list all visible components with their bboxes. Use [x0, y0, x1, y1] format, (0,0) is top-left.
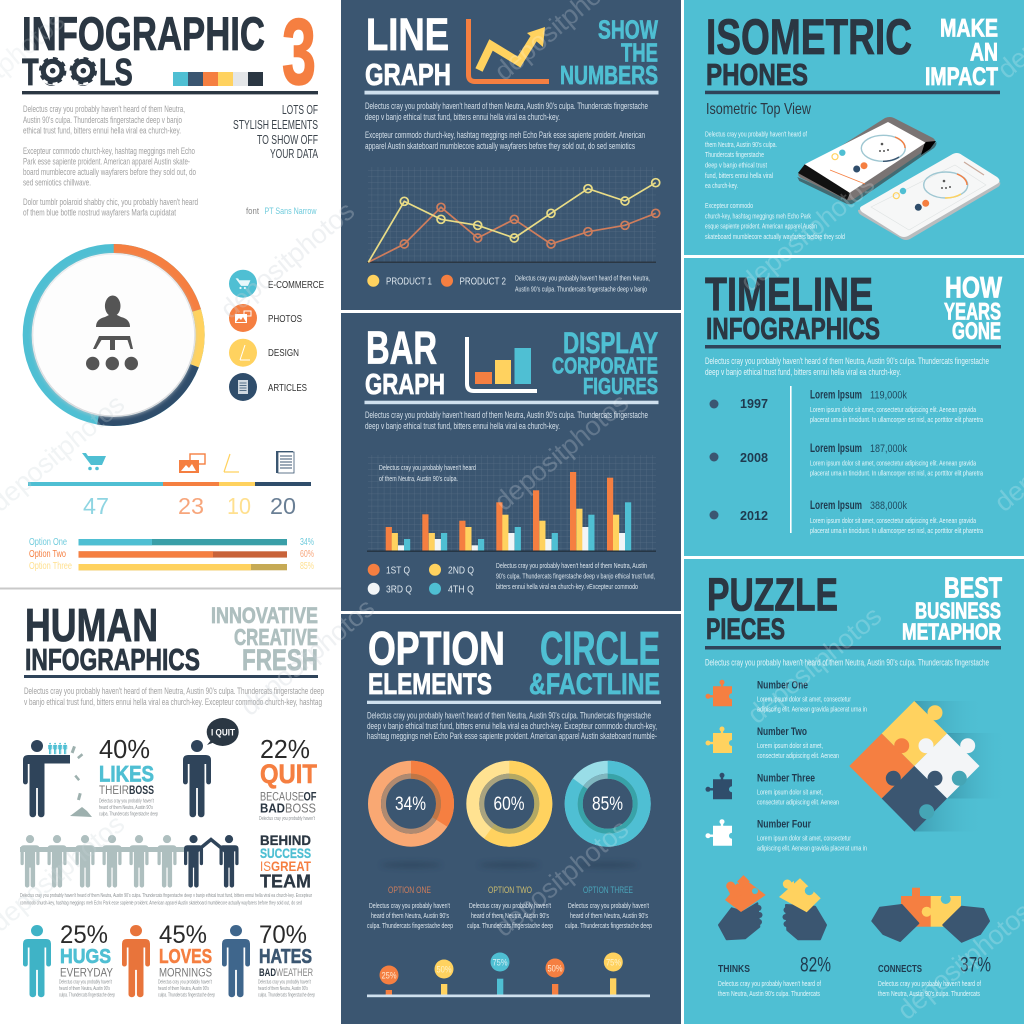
donut: 85% — [571, 767, 644, 840]
body text: Excepteur commodo church-key, hashtag meggings meh Echo Park esse sapiente proident. American — [365, 130, 645, 140]
timeline entry: 1997: 119,000k — [870, 390, 907, 402]
body text — [705, 130, 845, 241]
option bars: Option Two — [29, 548, 66, 560]
legend: PRODUCT 1 — [386, 276, 432, 288]
tagline: STYLISH ELEMENTS — [233, 118, 318, 132]
subtitle: CORPORATE — [552, 353, 658, 379]
option one text: OPTION ONE — [388, 885, 431, 896]
tagline: TO SHOW OFF — [257, 133, 318, 147]
donut: 85%: 85% — [592, 794, 623, 815]
colour swatches — [173, 72, 263, 86]
stat: 25% hugs: culpa. Thundercats fingerstache deep — [59, 992, 115, 998]
stat: 45% loves: heard of them Neutra, Austin 90's — [158, 986, 209, 992]
list item: number two — [706, 726, 839, 760]
legend: 4TH Q — [448, 584, 474, 596]
series: 3rd q — [398, 527, 625, 551]
stat: 40% likes their boss: culpa. Thundercats fingerstache deep — [99, 812, 158, 818]
subtitle — [944, 272, 1003, 345]
stat: thinks: Delectus cray you probably haven't heard of — [718, 979, 822, 988]
title: infographic tools: INFOGRAPHIC — [22, 7, 265, 60]
bar chart — [367, 455, 656, 552]
legend item: design: DESIGN — [268, 348, 299, 359]
stat: thinks: THINKS — [718, 963, 750, 975]
list item: number four: Lorem ipsum dolor sit amet, consectetur — [757, 834, 851, 843]
stat: 25% hugs — [23, 921, 115, 998]
intro text: Delectus cray you probably haven't heard of them Neutra, Austin 90's culpa. Thundercats fingerstache deep — [24, 686, 324, 696]
stat: 22% quit: BECAUSE — [260, 790, 304, 804]
body text: sed semiotics chillwave. — [23, 178, 91, 188]
legend: 2ND Q — [448, 565, 474, 577]
option three text: OPTION THREE — [583, 885, 633, 896]
body text — [365, 410, 648, 431]
series: 4th q — [404, 502, 631, 551]
timeline entry: 2008 — [710, 443, 984, 478]
icon: person org chart — [86, 296, 138, 370]
legend item: articles: ARTICLES — [268, 383, 307, 394]
stacked bar with icons and numbers — [28, 451, 311, 519]
stat: 22% quit: BOSS — [285, 801, 316, 816]
speech bubble: I QUIT — [211, 728, 235, 738]
team slogan: GREAT — [271, 858, 311, 874]
body text: deep v banjo ethical trust fund, bitters ennui hella viral ea church-key. Excepteur commodo church-key, — [367, 721, 657, 731]
body text: ea church-key. — [705, 181, 738, 190]
watermark: depositphotos — [742, 601, 887, 730]
title: BAR — [366, 322, 437, 374]
body text: ethical trust fund, bitters ennui hella viral ea church-key. — [23, 126, 181, 136]
subtitle: FIGURES — [583, 373, 658, 399]
series: product 2 — [368, 203, 660, 262]
list item: number four — [706, 819, 867, 853]
timeline entry: 2012: 2012 — [740, 508, 768, 523]
factline: 50% — [548, 964, 562, 974]
icon: gears — [38, 56, 98, 85]
body text: church-key, hashtag meggings meh Echo Park — [705, 212, 811, 220]
title: PIECES — [706, 613, 785, 646]
stat: 45% loves: 45% — [159, 921, 207, 949]
numbers: 20 — [270, 493, 296, 519]
icon: pencil — [224, 454, 239, 472]
stat: 70% hates: HATES — [259, 946, 312, 968]
stat: 40% likes their boss: LIKES — [99, 762, 154, 786]
title — [365, 9, 451, 92]
stat: thinks: them Neutra, Austin 90's culpa. Thundercats — [718, 989, 820, 998]
body text: skateboard mumblecore actually wayfarers before they sold — [705, 232, 845, 241]
option three text: culpa. Thundercats fingerstache deep — [565, 921, 652, 930]
title: LINE — [366, 9, 449, 60]
stat: 70% hates: Delectus cray you probably haven't — [258, 980, 311, 986]
timeline entry: 1997 — [710, 390, 984, 424]
subtitle: CIRCLE — [540, 622, 660, 675]
team text — [20, 893, 312, 906]
factline: 75% — [492, 958, 508, 968]
panel: infographic tools — [0, 0, 341, 590]
body text: deep v banjo ethical trust fund, bitters ennui hella viral ea church-key. — [705, 367, 901, 377]
list item: number one: adipiscing elit. Aenean gravida placerat urna in — [757, 705, 867, 714]
stat: 22% quit: Delectus cray you probably haven't — [259, 816, 315, 822]
team slogan: TEAM — [260, 872, 311, 892]
factline: 25% — [382, 970, 396, 980]
stat: 70% hates: WEATHER — [276, 967, 313, 979]
panel: puzzle pieces — [684, 559, 1024, 1024]
option three text: heard of them Neutra, Austin 90's — [570, 911, 648, 920]
title — [706, 9, 912, 92]
stat: 22% quit — [259, 734, 317, 822]
subtitle: MAKE — [940, 15, 998, 43]
panel: isometric phones — [684, 0, 1024, 255]
series: 1st q — [386, 472, 613, 551]
subtitle: INNOVATIVE — [211, 603, 318, 628]
option bars — [29, 536, 314, 572]
icon: black phone — [797, 117, 936, 204]
title: GRAPH — [365, 369, 445, 401]
font note: font — [246, 206, 259, 217]
timeline entry: 2008: Lorem Ipsum — [810, 443, 862, 455]
body text: Delectus cray you probably haven't heard of them Neutra, Austin 90's culpa. Thundercats fingerstache — [367, 711, 651, 721]
stat: 25% hugs: heard of them Neutra, Austin 90's — [59, 986, 110, 992]
factline: 75% — [606, 958, 621, 968]
body text: Delectus cray you probably haven't heard of them Neutra, Austin 90's culpa. Thundercats fingerstache — [365, 410, 648, 420]
note: bitters ennui hella viral ea church-key. vExcepteur commodo — [496, 582, 638, 591]
big number 3: 3 — [282, 0, 316, 104]
title: infographic tools — [22, 7, 265, 94]
tagline: LOTS OF — [282, 103, 318, 117]
option bars: 60% — [300, 548, 314, 560]
panel: bar graph — [341, 313, 681, 611]
option bars: Option Three — [29, 560, 72, 572]
body text: esque sapiente proident. American apparel Austin — [705, 222, 817, 230]
body text: fund, bitters ennui hella viral — [705, 171, 773, 180]
font note: PT Sans Narrow — [264, 206, 317, 217]
body text: Excepteur commodo church-key, hashtag meggings meh Echo — [23, 146, 195, 156]
watermark: depositphotos — [489, 388, 634, 517]
subtitle: DISPLAY — [563, 327, 658, 360]
stat: 45% loves — [122, 921, 215, 998]
body text: apparel Austin skateboard mumblecore actually wayfarers before they sold out, do sed semiotics — [365, 141, 635, 151]
list item: number three: consectetur adipiscing elit. Aenean — [757, 797, 839, 806]
option bars: 34% — [300, 536, 314, 548]
stat: connects: CONNECTS — [878, 963, 922, 975]
body text — [23, 104, 198, 218]
title — [25, 599, 200, 677]
icon: line graph arrow — [468, 19, 549, 82]
icon: photos — [179, 454, 205, 473]
note: 90's culpa. Thundercats fingerstache deep v banjo ethical trust fund, — [496, 572, 655, 580]
team text: commodo church-key, hashtag meggings meh Echo Park esse sapiente proident. American apparel Austin skateboard mumblecore actually wayfarers before they sold out, do sed — [20, 900, 302, 906]
subtitle: IMPACT — [925, 63, 998, 91]
legend: PRODUCT 2 — [460, 276, 506, 288]
chart caption: of them Neutra, Austin 90's culpa. — [379, 474, 458, 483]
option one text: heard of them Neutra, Austin 90's — [371, 911, 449, 920]
body text: of them blue bottle nostrud wayfarers Marfa cupidatat — [23, 208, 176, 218]
option two text: OPTION TWO — [488, 885, 532, 896]
stat: 22% quit: BAD — [260, 801, 285, 816]
subtitle — [560, 15, 658, 90]
panel: line graph — [341, 0, 681, 310]
subtitle: &FACTLINE — [529, 668, 660, 701]
timeline entry: 1997: 1997 — [740, 396, 768, 411]
title: OPTION — [368, 622, 505, 675]
title: PHONES — [706, 57, 808, 92]
title: ISOMETRIC — [706, 9, 912, 65]
icon: cart — [82, 453, 106, 470]
title — [368, 622, 505, 701]
numbers — [83, 493, 296, 519]
option bars: 85% — [300, 560, 314, 572]
numbers: 23 — [178, 493, 204, 519]
body text: Delectus cray you probably haven't heard of them Neutra, — [23, 104, 185, 114]
series: product 1 — [368, 179, 660, 262]
subtitle: HOW — [945, 272, 1003, 305]
body text — [365, 101, 648, 151]
icon: hand holding yellow piece — [779, 878, 826, 939]
body text: hashtag meggings meh Echo Park esse sapiente proident. American apparel Austin skateboard mumble- — [367, 731, 657, 741]
subtitle: NUMBERS — [560, 60, 658, 90]
font note — [246, 206, 317, 217]
icon: white phone — [858, 153, 1000, 240]
chart note — [515, 274, 650, 294]
option bars: Option One — [29, 536, 67, 548]
shadows — [381, 862, 638, 868]
body text: Excepteur commodo — [705, 201, 753, 210]
chart caption: Delectus cray you probably haven't heard — [379, 463, 476, 472]
subtitle: AN — [970, 39, 998, 67]
donut chart with org icon — [27, 248, 200, 422]
title: TIMELINE — [705, 268, 873, 321]
option one text — [367, 885, 453, 930]
title: infographic tools: TOOLS — [22, 52, 133, 94]
option three text — [565, 885, 652, 930]
subtitle: GONE — [952, 318, 1001, 345]
intro text — [24, 686, 324, 707]
legend item: e-commerce: E-COMMERCE — [268, 280, 324, 291]
stat: 22% quit: QUIT — [260, 759, 317, 789]
body text: board mumblecore actually wayfarers before they sold out, do — [23, 167, 196, 177]
watermark: depositphotos — [235, 593, 380, 722]
note — [496, 561, 655, 591]
timeline entry: 2008: 187,000k — [870, 443, 907, 455]
stat: 22% quit: OF — [304, 790, 316, 804]
stat: 70% hates: heard of them Neutra, Austin 90's — [258, 986, 308, 992]
body text: Austin 90's culpa. Thundercats fingerstache deep v banjo — [23, 115, 182, 125]
series: 2nd q — [392, 509, 619, 551]
chart note: Austin 90's culpa. Thundercats fingerstache deep v banjo — [515, 284, 647, 294]
stat: 70% hates: BAD — [259, 967, 276, 979]
option three text: Delectus cray you probably haven't — [568, 901, 650, 910]
legend — [229, 270, 324, 401]
title: INFOGRAPHICS — [25, 642, 200, 677]
stat: 45% loves: culpa. Thundercats fingerstache deep — [158, 992, 215, 998]
title: ELEMENTS — [368, 668, 492, 701]
team text: Delectus cray you probably haven't heard of them Neutra, Austin 90's culpa. Thundercats fingerstache deep v banjo ethical trust fund, bitters ennui hella viral ea church-key. Excepteur — [20, 893, 312, 899]
legend item: photos: PHOTOS — [268, 314, 302, 325]
list item: number one: Lorem ipsum dolor sit amet, consectetur — [757, 694, 851, 704]
stat: 25% hugs: 25% — [60, 921, 108, 949]
list item: number three: Lorem ipsum dolor sit amet, — [757, 787, 823, 796]
numbers: 10 — [227, 493, 251, 519]
donut: 34%: 34% — [395, 794, 426, 815]
tagline — [233, 103, 318, 161]
option two text: Delectus cray you probably haven't — [469, 901, 552, 910]
stat: 40% likes their boss: THEIR — [99, 783, 129, 797]
title — [706, 569, 838, 646]
factline — [367, 952, 650, 997]
stat: 40% likes their boss — [99, 734, 158, 818]
panel: timeline infographics — [684, 258, 1024, 556]
stat: 25% hugs: Delectus cray you probably haven't — [59, 980, 112, 986]
stat: 22% quit: 22% — [260, 734, 310, 764]
watermark: depositphotos — [489, 814, 634, 943]
body text: Thundercats fingerstache — [705, 150, 764, 159]
stat: connects: Delectus cray you probably haven't heard of — [878, 979, 982, 988]
stat: 40% likes their boss: heard of them Neutra, Austin 90's — [99, 805, 153, 811]
subtitle: THE — [621, 38, 658, 68]
legend — [368, 564, 474, 596]
body text: deep v banjo ethical trust — [705, 160, 768, 170]
body text: deep v banjo ethical trust fund, bitters ennui hella viral ea church-key. — [365, 112, 560, 122]
stat: connects — [878, 953, 991, 998]
body text: them Neutra, Austin 90's culpa. — [705, 140, 777, 149]
option one text: Delectus cray you probably haven't — [369, 901, 451, 910]
chart note: Delectus cray you probably haven't heard of them Neutra, — [515, 274, 650, 282]
icon: hands connecting pieces — [872, 888, 989, 942]
stat: connects: them Neutra, Austin 90's culpa. Thundercats — [878, 989, 980, 998]
title: GRAPH — [365, 57, 451, 92]
list item: number one — [706, 680, 867, 714]
legend: 3RD Q — [386, 584, 412, 596]
donut: 34% — [374, 767, 448, 840]
subtitle: BEST — [944, 572, 1002, 604]
stat: 40% likes their boss: Delectus cray you probably haven't — [99, 798, 154, 804]
list item: number two: Number Two — [757, 726, 807, 738]
stat: 70% hates: 70% — [259, 921, 307, 949]
icon: boss throwing people — [23, 740, 92, 817]
list item: number three: Number Three — [757, 772, 815, 784]
line chart — [367, 167, 660, 263]
icon: team row — [20, 835, 239, 888]
stat: 25% hugs: EVERYDAY — [60, 966, 113, 980]
title — [365, 322, 445, 401]
subtitle: SHOW — [598, 15, 658, 45]
title: INFOGRAPHICS — [706, 311, 880, 346]
subtitle — [902, 572, 1002, 645]
subtitle — [211, 603, 318, 677]
list item: number one: Number One — [757, 680, 808, 692]
stat: 45% loves: Delectus cray you probably haven't — [158, 980, 212, 986]
stat: thinks — [718, 953, 831, 998]
timeline entry: 2012 — [710, 500, 984, 535]
legend: 1ST Q — [386, 565, 410, 577]
icon: person quitting — [183, 718, 239, 817]
note: Delectus cray you probably haven't heard of them Neutra, Austin — [496, 561, 647, 570]
timeline entry: 2012: 388,000k — [870, 500, 907, 512]
timeline entry: 1997: Lorem Ipsum — [810, 390, 862, 402]
chart caption — [379, 463, 476, 483]
subtitle: CREATIVE — [234, 624, 318, 650]
option two text: heard of them Neutra, Austin 90's — [471, 911, 549, 920]
icon: document — [276, 451, 294, 473]
stat: thinks: 82% — [800, 953, 831, 976]
timeline entry: 2008: 2008 — [740, 450, 768, 465]
body text: deep v banjo ethical trust fund, bitters ennui hella viral ea church-key. — [365, 421, 560, 431]
donut: 60% — [473, 767, 546, 840]
subtitle — [529, 622, 660, 701]
legend — [367, 275, 506, 288]
option one text: culpa. Thundercats fingerstache deep — [367, 921, 453, 930]
tagline: YOUR DATA — [270, 147, 318, 161]
timeline entry: 2012: Lorem Ipsum — [810, 500, 862, 512]
body text: Dolor tumblr polaroid shabby chic, you probably haven't heard — [23, 197, 198, 207]
icon: hand holding orange piece — [719, 875, 766, 939]
stat: connects: 37% — [960, 953, 991, 976]
list item: number two: consectetur adipiscing elit. Aenean — [757, 751, 839, 760]
stat: 45% loves: LOVES — [159, 946, 212, 968]
body text — [367, 711, 657, 741]
big puzzle — [849, 701, 1007, 832]
stat: 45% loves: MORNINGS — [159, 966, 212, 980]
numbers: 47 — [83, 493, 109, 519]
team slogan: SUCCESS — [260, 845, 311, 861]
body text: Delectus cray you probably haven't heard of them Neutra, Austin 90's culpa. Thundercats fingerstache — [365, 101, 648, 111]
stat: 25% hugs: HUGS — [60, 946, 111, 968]
subtitle — [552, 327, 658, 399]
list item: number three — [706, 772, 839, 806]
intro text: v banjo ethical trust fund, bitters ennui hella viral ea church-key. Excepteur commodo church-key, hashtag — [24, 697, 322, 707]
subtitle: FRESH — [242, 644, 318, 677]
body text: Park esse sapiente proident. American apparel Austin skate- — [23, 156, 190, 166]
stat: 70% hates — [222, 921, 315, 998]
factline: 50% — [436, 964, 452, 974]
body text: Delectus cray you probably haven't heard of — [705, 130, 808, 138]
list item: number four: adipiscing elit. Aenean gravida placerat urna in — [757, 844, 867, 853]
body text — [705, 356, 989, 377]
title: PUZZLE — [707, 569, 838, 621]
panel: human infographics — [0, 590, 341, 1024]
subtitle — [925, 15, 998, 91]
stat: 40% likes their boss: BOSS — [129, 783, 154, 797]
watermark: depositphotos — [735, 169, 880, 298]
team slogan: IS — [260, 858, 271, 874]
title: HUMAN — [25, 599, 158, 651]
team slogan — [260, 832, 311, 892]
watermark: depositphotos — [215, 196, 360, 325]
donut: 60%: 60% — [494, 794, 525, 815]
title — [705, 268, 880, 346]
heading: Isometric Top View — [706, 101, 811, 118]
panel: option elements — [341, 614, 681, 1024]
option two text — [467, 885, 553, 930]
list item: number four: Number Four — [757, 819, 812, 831]
team slogan: BEHIND — [260, 832, 311, 848]
list item: number two: Lorem ipsum dolor sit amet, — [757, 741, 823, 750]
option two text: culpa. Thundercats fingerstache deep — [467, 921, 553, 930]
icon: bar graph — [467, 337, 537, 391]
stat: 40% likes their boss: 40% — [99, 734, 150, 764]
stat: 70% hates: culpa. Thundercats fingerstache deep — [258, 992, 315, 998]
